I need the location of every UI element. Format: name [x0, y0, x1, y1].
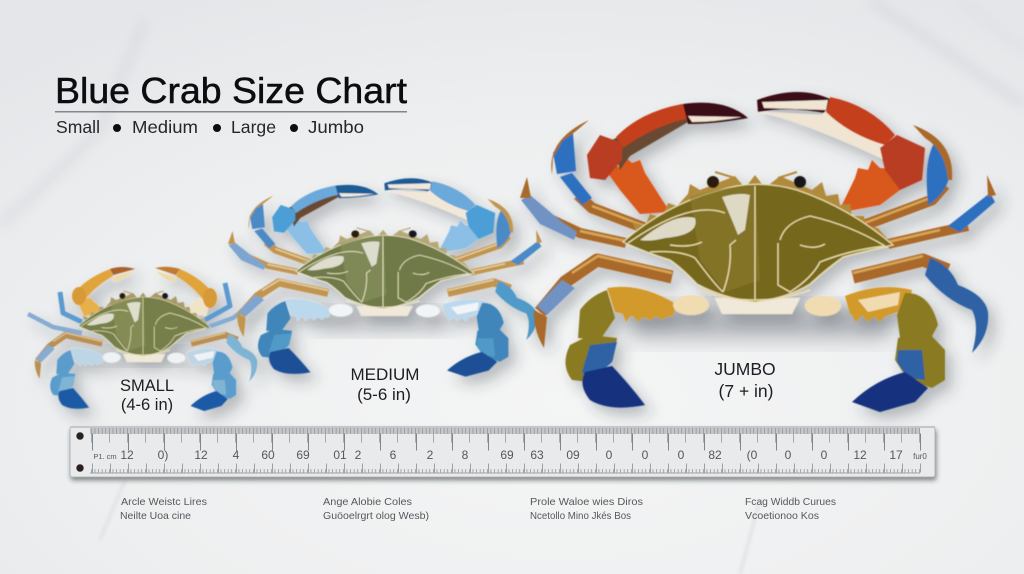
ruler numbers: 69: [296, 448, 310, 462]
caption 2: Guöoelrgrt olog Wesb): [323, 510, 429, 522]
ruler numbers: (0: [747, 448, 758, 462]
ruler numbers: 0): [158, 448, 168, 462]
ruler numbers: 6: [390, 448, 397, 462]
caption 3: [530, 496, 643, 522]
ruler numbers: 4: [233, 448, 240, 462]
size legend: Small: [56, 117, 100, 137]
caption 2: [323, 496, 429, 522]
ruler numbers: 0: [821, 448, 828, 462]
label: jumbo: JUMBO: [714, 359, 776, 379]
caption 4: Vcoetionoo Kos: [745, 510, 819, 522]
ruler numbers: 2: [355, 448, 362, 462]
ruler numbers: 2: [427, 448, 434, 462]
ruler numbers: 0: [606, 448, 613, 462]
caption 1: Arcle Weistc Lires: [121, 496, 207, 508]
label: medium: [351, 365, 419, 404]
title: Blue Crab Size Chart: [55, 70, 407, 111]
ruler numbers: 0: [678, 448, 685, 462]
caption 1: Neilte Uoa cine: [120, 510, 191, 522]
caption 1: [120, 496, 207, 522]
ruler numbers: [93, 448, 927, 462]
size legend: Medium: [132, 117, 198, 137]
small crab legs and claws: [28, 267, 253, 333]
size legend: [56, 117, 364, 137]
caption 4: Fcag Widdb Curues: [745, 496, 836, 508]
title rule: [55, 111, 407, 112]
label: medium: (5-6 in): [357, 385, 411, 404]
ruler numbers: 8: [462, 448, 469, 462]
label: jumbo: (7 + in): [719, 381, 773, 401]
medium crab: [228, 178, 542, 377]
ruler numbers: P1. cm: [93, 452, 117, 461]
ruler numbers: 60: [261, 448, 275, 462]
caption 2: Ange Alobie Coles: [323, 496, 412, 508]
ruler numbers: 12: [194, 448, 208, 462]
label: jumbo: [714, 359, 776, 401]
label: small: [120, 377, 174, 414]
ruler numbers: 63: [530, 448, 544, 462]
caption 3: Prole Waloe wies Diros: [530, 496, 643, 508]
label: small: (4-6 in): [121, 396, 173, 414]
label: medium: MEDIUM: [351, 365, 419, 384]
small crab: [28, 267, 257, 411]
ruler numbers: 82: [708, 448, 722, 462]
caption 4: [745, 496, 836, 522]
size legend: Jumbo: [308, 117, 364, 137]
ruler numbers: 0: [642, 448, 649, 462]
ruler numbers: fur0: [913, 452, 927, 461]
size legend: Large: [231, 117, 276, 137]
ruler numbers: 69: [500, 448, 514, 462]
ruler holes: [76, 432, 84, 472]
ruler numbers: 12: [853, 448, 867, 462]
label: small: SMALL: [120, 377, 174, 395]
ruler numbers: 09: [566, 448, 580, 462]
ruler numbers: 17: [889, 448, 903, 462]
ruler numbers: 12: [120, 448, 134, 462]
ruler numbers: 01: [333, 448, 347, 462]
jumbo crab: [520, 92, 996, 412]
ruler: [70, 426, 935, 477]
caption 3: Ncetollo Mino Jkés Bos: [530, 510, 631, 522]
ruler numbers: 0: [785, 448, 792, 462]
